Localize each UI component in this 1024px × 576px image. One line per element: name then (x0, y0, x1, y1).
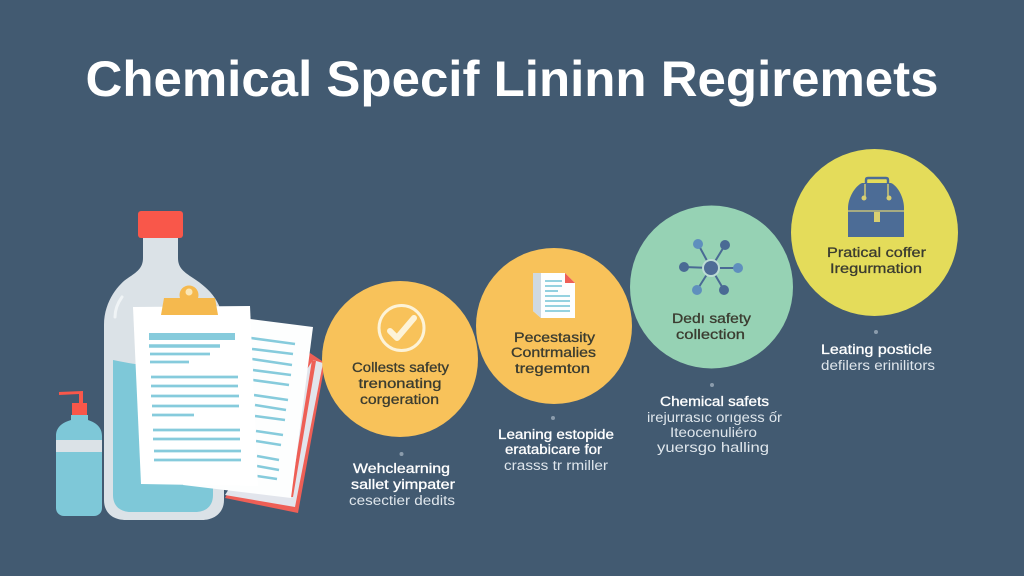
step 2 circle (476, 248, 632, 404)
caption: step 3: irejurrasıc orıgess ốr (647, 410, 783, 425)
step 2 label: tregemton (515, 361, 590, 376)
icon: check mark (379, 306, 424, 350)
caption: step 3: Iteocenuliéro (670, 425, 757, 440)
caption: step 4 (821, 330, 935, 373)
icon: molecule network (679, 239, 743, 295)
caption: step 3 (647, 383, 783, 455)
caption: step 1: cesectier dedits (349, 493, 455, 508)
icon: safety bag (848, 178, 904, 237)
front page (133, 306, 258, 486)
step 2 label: Pecestasity (514, 330, 595, 345)
step 1 label: Collests safety (352, 360, 449, 375)
caption: step 2: crasss tr rmiller (504, 458, 609, 473)
icon: small pump bottle (56, 391, 102, 516)
step 2 label (511, 330, 596, 376)
red binder behind pages (225, 353, 325, 513)
step 1 circle (322, 281, 478, 437)
caption: step 4: defilers erinilitors (821, 358, 935, 373)
caption: step 4: Leating posticle (821, 342, 932, 357)
step 3 label: collection (676, 327, 745, 342)
step 3 label (672, 311, 751, 342)
step 4 circle (791, 149, 958, 316)
step 1 label (352, 360, 449, 407)
caption: step 2: Leaning estopide (498, 427, 614, 442)
step 3 label: Dedı safety (672, 311, 751, 326)
step 3 circle (630, 206, 793, 368)
caption: step 1: Wehclearning (353, 461, 450, 476)
title: Chemical Specif Lininn Regiremets (86, 51, 939, 107)
caption: step 2 (498, 416, 614, 473)
caption: step 3: Chemical safets (660, 394, 769, 409)
icon: document (533, 273, 575, 318)
icon: large chemical bottle (104, 211, 224, 520)
icon: documents and clipboard (133, 286, 325, 513)
step 4 label (827, 245, 927, 276)
clipboard clip (161, 286, 218, 315)
step 4 label: Iregurmation (830, 261, 922, 276)
step 4 label: Pratical coffer (827, 245, 927, 260)
caption: step 1 (349, 452, 456, 508)
back page (183, 319, 313, 498)
caption: step 2: eratabicare for (505, 442, 603, 457)
caption: step 3: yuersgo halling (657, 440, 769, 455)
step 1 label: trenonating (358, 376, 442, 391)
caption: step 1: sallet yimpater (351, 477, 456, 492)
step 1 label: corgeration (360, 392, 439, 407)
step 2 label: Contrmalies (511, 345, 596, 360)
